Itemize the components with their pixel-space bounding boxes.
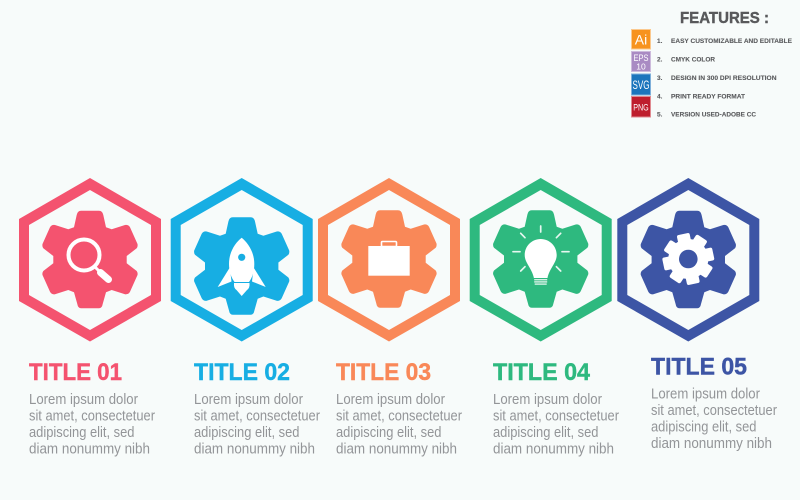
description 5: sit amet, consectetuer [651,403,777,419]
step 1: search hexagon [19,178,161,342]
description 4: sit amet, consectetuer [493,409,619,425]
icon: white cog [662,233,715,285]
hexagon frame 3 [318,178,460,342]
feature item 2: 2. [657,56,663,64]
description 3: adipiscing elit, sed [336,425,442,441]
description 5 [651,386,777,452]
feature item 1: EASY CUSTOMIZABLE AND EDITABLE [671,38,793,45]
description 5: adipiscing elit, sed [651,420,756,436]
hexagon frame 1 [19,178,161,342]
gear 5 [641,211,736,308]
icon: EPS file badge: EPS [634,53,648,63]
hexagon frame 2 [171,178,313,342]
text block 5 [651,354,777,452]
icon: PNG file badge [632,96,650,117]
description 2 [194,392,320,457]
text block 4 [493,359,619,457]
description 5: Lorem ipsum dolor [651,386,760,402]
step 2: rocket hexagon [171,178,313,342]
icon: SVG file badge: SVG [632,78,650,92]
icon: magnifying glass [68,240,108,280]
description 1: sit amet, consectetuer [29,409,155,425]
description 3 [336,392,462,457]
icon: PNG file badge: PNG [633,102,649,112]
description 4 [493,392,619,457]
description 5: diam nonummy nibh [651,436,772,452]
icon: briefcase [368,242,410,276]
icon: Ai file badge: Ai [635,32,647,48]
step 4: light bulb hexagon [470,178,612,342]
text block 1 [29,359,155,457]
feature item 3: DESIGN IN 300 DPI RESOLUTION [671,75,777,82]
description 3: sit amet, consectetuer [336,409,462,425]
description 1: adipiscing elit, sed [29,425,134,441]
feature item 3: 3. [657,75,663,82]
gear 3 [341,210,437,308]
feature item 5: VERSION USED-ADOBE CC [671,112,756,119]
hexagon frame 4 [470,178,612,342]
panel: features [632,10,793,119]
step 5: gear hexagon [617,178,759,342]
text block 3 [336,359,462,457]
hexagon frame 5 [617,178,759,342]
title 05: TITLE 05 [651,354,747,380]
title 03: TITLE 03 [336,359,431,386]
description 2: adipiscing elit, sed [194,425,300,441]
gear 2 [194,217,289,315]
feature item 5: 5. [657,112,663,119]
icon: rocket [218,238,266,296]
icon: EPS file badge [632,52,650,72]
feature item 4: 4. [657,93,663,100]
gear 4 [493,210,588,308]
icon: SVG file badge [632,74,650,95]
description 4: Lorem ipsum dolor [493,392,602,408]
feature item 2: CMYK COLOR [671,56,715,64]
description 2: Lorem ipsum dolor [194,392,303,408]
description 1: Lorem ipsum dolor [29,392,138,408]
description 4: diam nonummy nibh [493,441,614,457]
description 4: adipiscing elit, sed [493,425,598,441]
description 3: Lorem ipsum dolor [336,392,445,408]
description 1 [29,392,155,457]
title 01: TITLE 01 [29,359,122,386]
icon: light bulb [513,226,569,285]
description 3: diam nonummy nibh [336,441,457,457]
description 2: diam nonummy nibh [194,441,315,457]
icon: EPS file badge: 10 [636,62,646,72]
feature item 4: PRINT READY FORMAT [671,93,745,100]
icon: Ai file badge [632,30,650,49]
description 1: diam nonummy nibh [29,441,150,457]
title 02: TITLE 02 [194,359,290,386]
heading: features: FEATURES : [680,10,769,27]
text block 2 [194,359,320,457]
step 3: briefcase hexagon [318,178,460,342]
gear 1 [42,211,138,308]
description 2: sit amet, consectetuer [194,409,320,425]
title 04: TITLE 04 [493,359,590,386]
feature item 1: 1. [657,38,663,45]
